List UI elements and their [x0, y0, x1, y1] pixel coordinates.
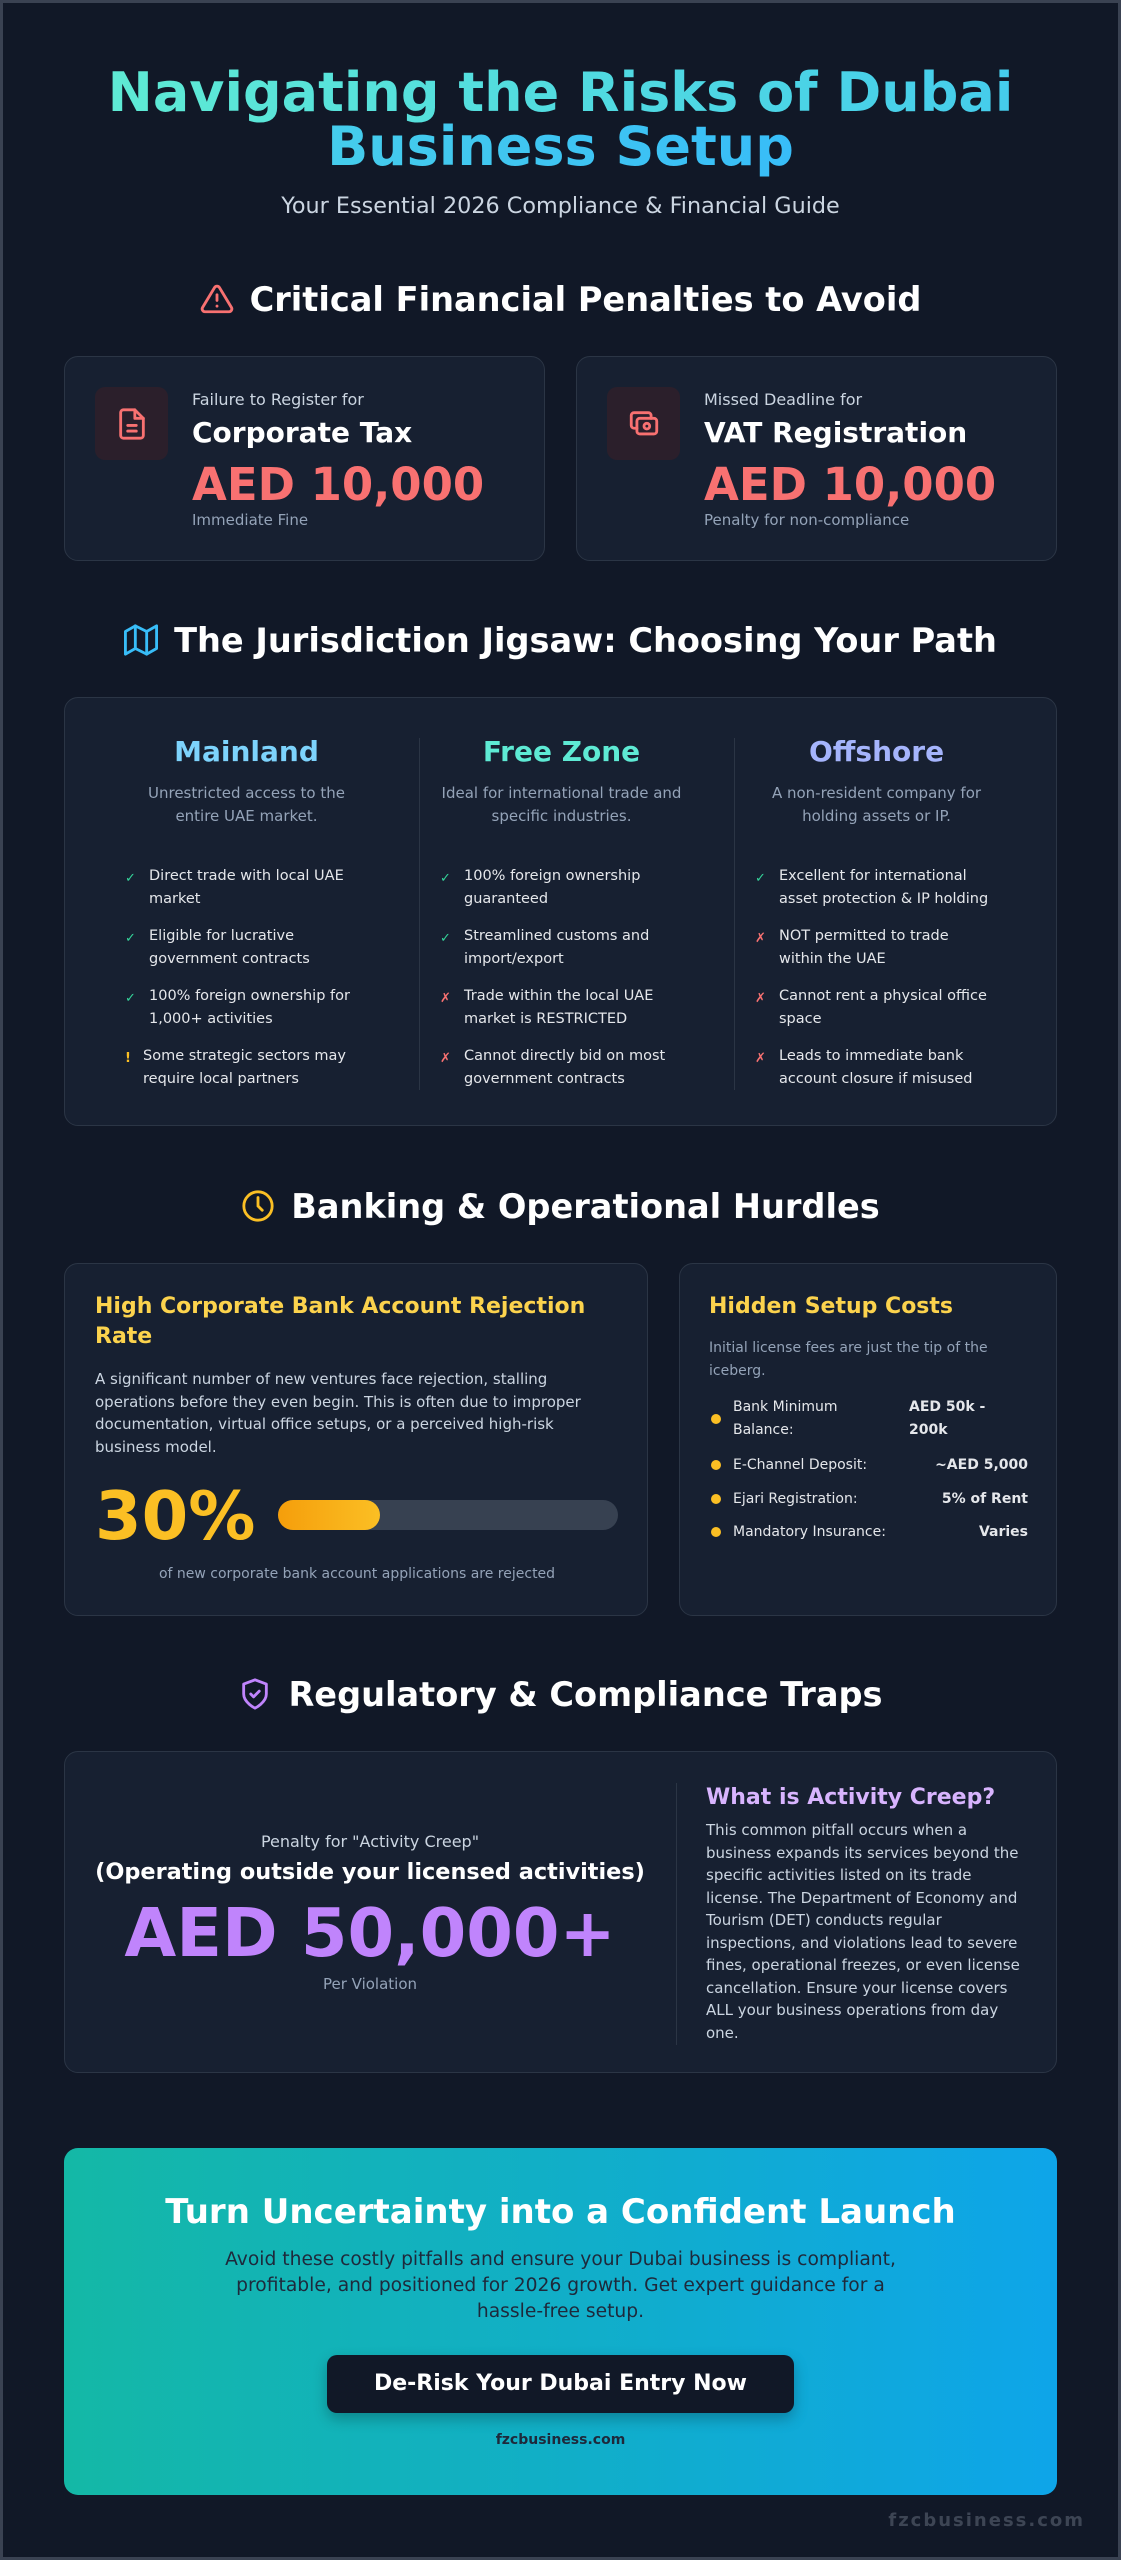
column: free zone: Trade within the local UAE	[464, 988, 653, 1004]
panel: jurisdictions	[64, 697, 1057, 1126]
CTA title: Turn Uncertainty into a Confident Launch	[165, 2192, 956, 2232]
watermark: fzcbusiness.com	[888, 2510, 1085, 2531]
text: what is activity creep: inspections, and violations lead to severe	[706, 1934, 1017, 1952]
CTA text: Avoid these costly pitfalls and ensure your Dubai business is compliant,	[225, 2249, 896, 2270]
list: costs: Varies	[979, 1524, 1028, 1540]
heading: rejection rate: Rate	[95, 1324, 152, 1349]
column: offshore: space	[779, 1011, 822, 1027]
text: what is activity creep: fines, operational freezes, or even license	[706, 1956, 1020, 1974]
title: Business Setup	[327, 115, 794, 178]
heading: rejection rate	[95, 1294, 585, 1349]
text: description	[95, 1370, 581, 1456]
title	[108, 61, 1013, 178]
subtitle: Your Essential 2026 Compliance & Financial Guide	[281, 193, 840, 219]
text: what is activity creep: This common pitfall occurs when a	[706, 1821, 967, 1839]
text: what is activity creep: specific activities listed on its trade	[706, 1866, 971, 1884]
column: free zone: market is RESTRICTED	[464, 1011, 627, 1027]
list: costs: E-Channel Deposit:	[733, 1457, 867, 1473]
icon: shield	[242, 1678, 268, 1710]
column: mainland: Some strategic sectors may	[143, 1048, 346, 1064]
list: costs: Balance:	[733, 1422, 794, 1438]
penalty stat	[95, 1832, 645, 1993]
icon: document	[95, 387, 168, 460]
heading: penalties: Critical Financial Penalties to Avoid	[250, 280, 921, 318]
column: offshore: within the UAE	[779, 951, 886, 967]
panel: hidden costs: Hidden Setup Costs	[709, 1294, 953, 1319]
column: free zone: guaranteed	[464, 891, 548, 907]
penalty stat: Penalty for "Activity Creep"	[261, 1832, 479, 1851]
column: mainland	[125, 735, 350, 1087]
column: free zone: ✗	[440, 991, 451, 1006]
text: what is activity creep: one.	[706, 2024, 739, 2042]
panel: corporate tax penalty	[64, 356, 545, 561]
text: corporate tax fine: Corporate Tax	[192, 416, 412, 449]
column: offshore: account closure if misused	[779, 1071, 972, 1087]
panel: hidden costs	[679, 1263, 1057, 1616]
text: what is activity creep: cancellation. Ensure your license covers	[706, 1978, 1008, 1996]
column: free zone: ✓	[440, 871, 451, 886]
button	[327, 2355, 794, 2413]
stat: 30%: 30%	[95, 1477, 255, 1555]
penalty stat: AED 50,000+	[124, 1894, 616, 1972]
list: costs: 5% of Rent	[942, 1491, 1028, 1507]
penalty stat: (Operating outside your licensed activities)	[95, 1859, 645, 1885]
icon: clock	[242, 1190, 274, 1222]
title: Navigating the Risks of Dubai	[108, 61, 1013, 124]
column: free zone: specific industries.	[492, 807, 632, 825]
icon: money	[607, 387, 680, 460]
column: mainland: Eligible for lucrative	[149, 928, 294, 944]
CTA text: profitable, and positioned for 2026 growth. Get expert guidance for a	[236, 2275, 885, 2296]
column: offshore: asset protection & IP holding	[779, 891, 988, 907]
column: mainland: ✓	[125, 991, 136, 1006]
text: what is activity creep: What is Activity Creep?	[706, 1785, 995, 1810]
text: description: operations before they even begin. This is often due to improper	[95, 1392, 581, 1410]
text: what is activity creep: business expands its services beyond the	[706, 1844, 1018, 1862]
heading: compliance: Regulatory & Compliance Traps	[288, 1674, 883, 1714]
column: offshore: A non-resident company for	[772, 784, 981, 802]
column: offshore: Excellent for international	[779, 868, 967, 884]
text: what is activity creep: Tourism (DET) conducts regular	[706, 1911, 942, 1929]
bar chart: progress	[278, 1500, 618, 1530]
caption: of new corporate bank account applications are rejected	[159, 1566, 555, 1582]
text: description: A significant number of new ventures face rejection, stalling	[95, 1370, 547, 1388]
column: free zone: import/export	[464, 951, 564, 967]
text: VAT fine	[704, 390, 996, 529]
column: offshore: NOT permitted to trade	[779, 928, 949, 944]
text: corporate tax fine	[192, 390, 484, 529]
list: costs: Bank Minimum	[733, 1399, 838, 1415]
list: costs: 200k	[909, 1422, 948, 1438]
column: free zone: government contracts	[464, 1071, 625, 1087]
column: mainland: entire UAE market.	[175, 807, 318, 825]
column: mainland: market	[149, 891, 200, 907]
column: mainland: Unrestricted access to the	[148, 784, 345, 802]
CTA link: fzcbusiness.com	[496, 2432, 625, 2448]
panel: VAT penalty	[576, 356, 1057, 561]
button: De-Risk Your Dubai Entry Now	[374, 2371, 747, 2396]
column: free zone: Free Zone	[483, 735, 640, 768]
heading: banking: Banking & Operational Hurdles	[291, 1186, 880, 1226]
text: corporate tax fine: AED 10,000	[192, 458, 484, 511]
column: offshore: Leads to immediate bank	[779, 1048, 963, 1064]
column: mainland: 100% foreign ownership for	[149, 988, 350, 1004]
panel: activity creep	[64, 1751, 1057, 2073]
panel: hidden costs: iceberg.	[709, 1363, 766, 1379]
column: mainland: 1,000+ activities	[149, 1011, 273, 1027]
column: offshore	[755, 735, 988, 1087]
text: VAT fine: Missed Deadline for	[704, 390, 862, 409]
text: what is activity creep: license. The Department of Economy and	[706, 1888, 1017, 1906]
column: offshore: Cannot rent a physical office	[779, 988, 987, 1004]
text: corporate tax fine: Immediate Fine	[192, 511, 308, 529]
column: free zone: Streamlined customs and	[464, 928, 649, 944]
text: VAT fine: Penalty for non-compliance	[704, 511, 909, 529]
column: mainland: ✓	[125, 871, 136, 886]
list: costs: Ejari Registration:	[733, 1491, 858, 1507]
list: costs	[711, 1399, 1028, 1540]
column: offshore: ✗	[755, 931, 766, 946]
column: free zone: Cannot directly bid on most	[464, 1048, 665, 1064]
heading: rejection rate: High Corporate Bank Account Rejection	[95, 1294, 585, 1319]
CTA text: hassle-free setup.	[477, 2301, 644, 2322]
icon: warning	[200, 284, 234, 314]
column: free zone: ✓	[440, 931, 451, 946]
heading: jurisdiction: The Jurisdiction Jigsaw: Choosing Your Path	[174, 620, 997, 660]
text: corporate tax fine: Failure to Register for	[192, 390, 364, 409]
column: offshore: Offshore	[809, 735, 944, 768]
panel: hidden costs: Initial license fees are just the tip of the	[709, 1340, 988, 1356]
column: mainland: require local partners	[143, 1071, 299, 1087]
column: offshore: ✗	[755, 1051, 766, 1066]
column: mainland: Direct trade with local UAE	[149, 868, 344, 884]
text: what is activity creep	[706, 1785, 1020, 2042]
icon: map	[124, 624, 158, 656]
column: mainland: !	[125, 1051, 131, 1066]
column: offshore: ✓	[755, 871, 766, 886]
panel: bank rejection	[64, 1263, 648, 1616]
text: description: business model.	[95, 1438, 217, 1456]
column: free zone: ✗	[440, 1051, 451, 1066]
column: offshore: holding assets or IP.	[802, 807, 951, 825]
column: free zone	[440, 735, 681, 1087]
panel: call to action	[64, 2148, 1057, 2495]
column: offshore: ✗	[755, 991, 766, 1006]
text: what is activity creep: ALL your business operations from day	[706, 2001, 998, 2019]
list: costs: AED 50k -	[909, 1399, 985, 1415]
list: costs: ~AED 5,000	[935, 1457, 1028, 1473]
column: free zone: Ideal for international trade and	[442, 784, 681, 802]
list: costs: Mandatory Insurance:	[733, 1524, 886, 1540]
column: mainland: ✓	[125, 931, 136, 946]
penalty stat: Per Violation	[323, 1975, 417, 1993]
column: free zone: 100% foreign ownership	[464, 868, 640, 884]
column: mainland: government contracts	[149, 951, 310, 967]
text: description: documentation, virtual office setups, or a perceived high-risk	[95, 1415, 554, 1433]
CTA text	[225, 2249, 896, 2322]
column: mainland: Mainland	[174, 735, 319, 768]
text: VAT fine: AED 10,000	[704, 458, 996, 511]
text: VAT fine: VAT Registration	[704, 416, 967, 449]
